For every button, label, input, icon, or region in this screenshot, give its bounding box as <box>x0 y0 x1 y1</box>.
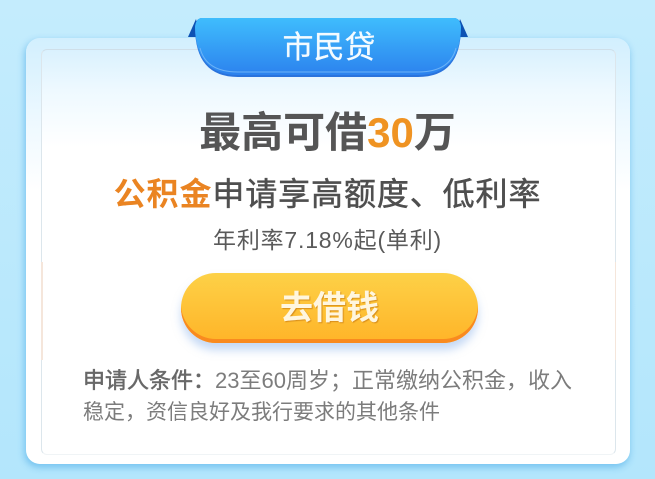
ribbon label: 市民贷 <box>282 30 376 65</box>
button label: 去借钱 <box>280 289 379 326</box>
accent: gold side line left <box>41 262 42 360</box>
text: applicant conditions: 稳定，资信良好及我行要求的其他条件 <box>83 401 440 424</box>
panel: inner card <box>41 49 616 455</box>
accent: gold side line right <box>614 262 616 360</box>
heading: max loan: 最高可借30万 <box>199 109 456 156</box>
subheading: benefits: 公积金申请享高额度、低利率 <box>114 176 541 212</box>
text: applicant conditions <box>83 368 572 424</box>
text: applicant conditions: 申请人条件：23至60周岁；正常缴纳公积金，收入 <box>83 368 572 393</box>
text: annual rate: 年利率7.18%起(单利) <box>213 227 442 253</box>
ribbon tab <box>188 18 468 77</box>
button: borrow <box>181 273 478 343</box>
